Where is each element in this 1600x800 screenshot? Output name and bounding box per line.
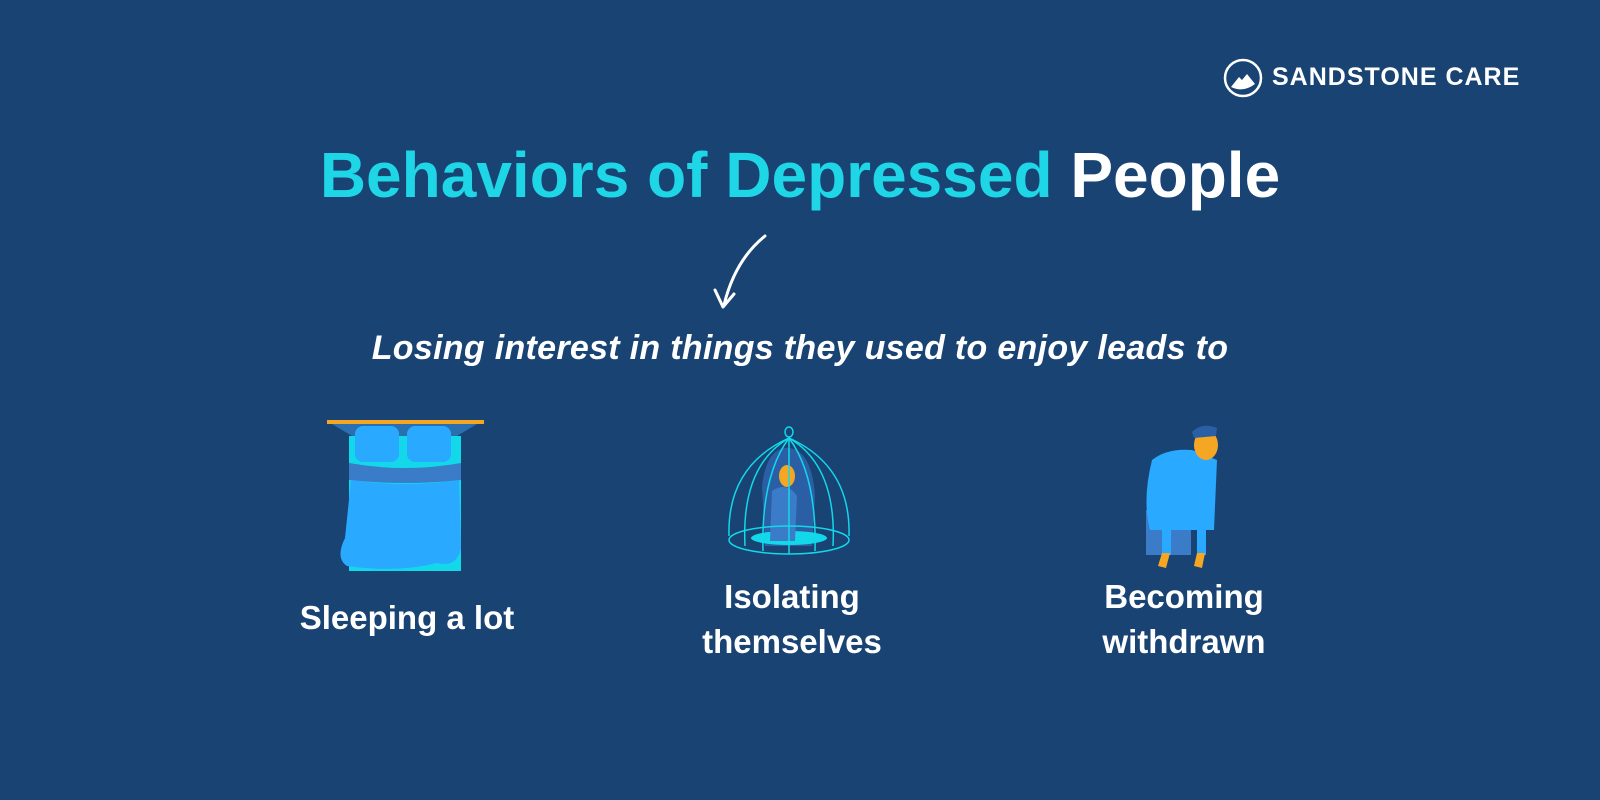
icon: withdrawn person [1146, 426, 1218, 568]
logo [1224, 58, 1520, 98]
label: isolating [702, 578, 882, 660]
arrow [713, 234, 767, 308]
logo: SANDSTONE CARE [1272, 63, 1520, 91]
icon: cage [728, 426, 850, 555]
label: withdrawn: withdrawn [1102, 623, 1266, 660]
label: isolating: Isolating [724, 578, 860, 615]
label: withdrawn [1102, 578, 1266, 660]
subtitle: Losing interest in things they used to enjoy leads to [372, 329, 1228, 367]
label: withdrawn: Becoming [1104, 578, 1264, 615]
label: isolating: themselves [702, 623, 882, 660]
title: Behaviors of Depressed People [320, 139, 1280, 211]
label: sleeping: Sleeping a lot [300, 599, 514, 636]
icon: bed [327, 420, 484, 571]
